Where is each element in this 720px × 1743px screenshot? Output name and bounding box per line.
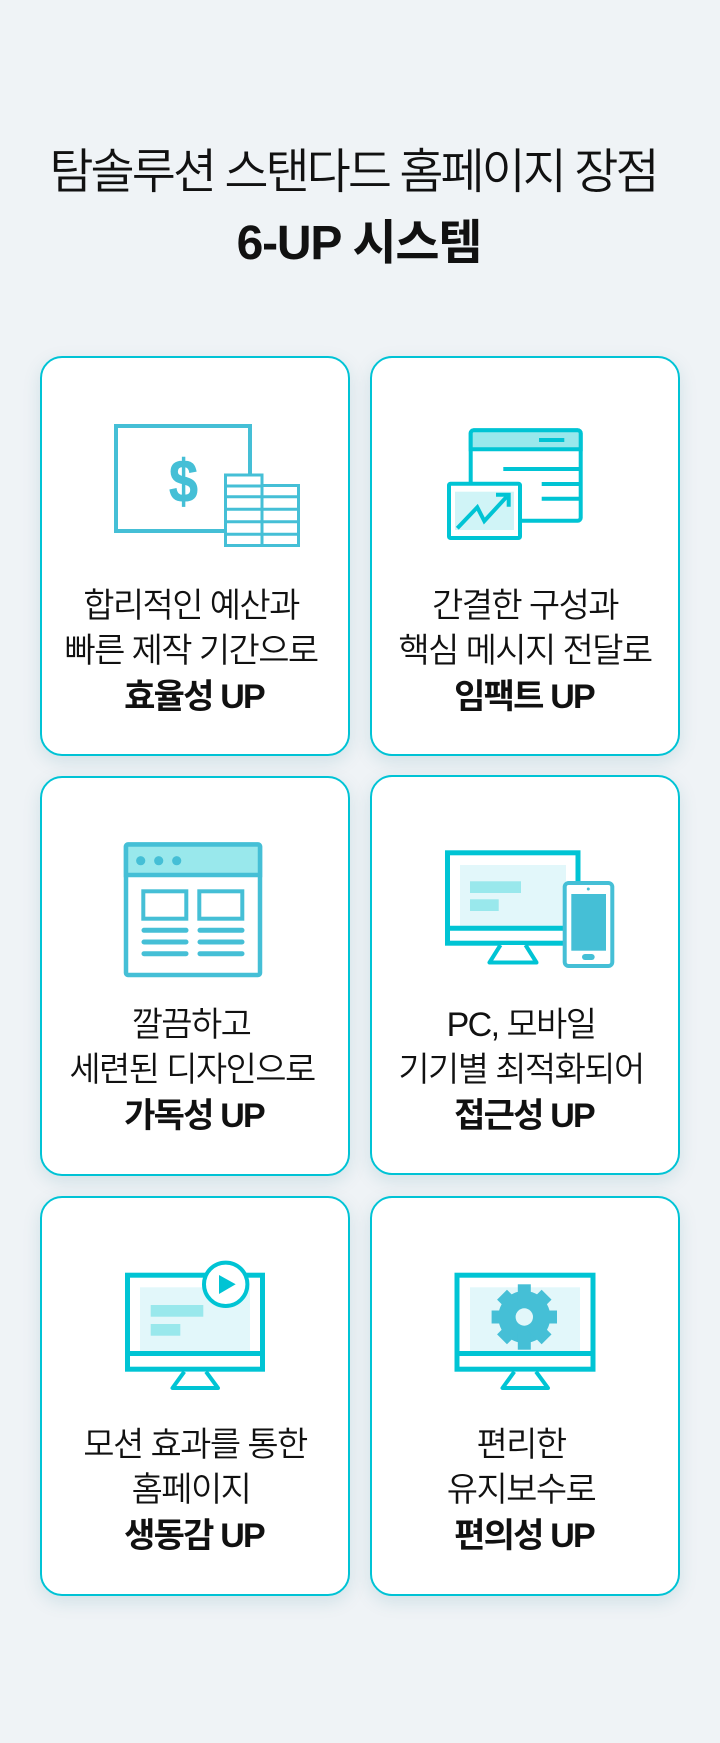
panel: 생동감 UP <box>40 1196 350 1596</box>
text: 접근성: 접근성 UP <box>454 1097 594 1135</box>
text: 생동감: 모션 효과를 통한 <box>83 1426 307 1464</box>
text: 효율성: 효율성 UP <box>124 678 264 716</box>
text: 편의성 <box>447 1426 595 1555</box>
panel: 효율성 UP <box>40 356 350 756</box>
title line 2: 6-UP 시스템 <box>237 217 481 270</box>
text: 임팩트: 핵심 메시지 전달로 <box>398 632 652 670</box>
text: 가독성: 가독성 UP <box>124 1097 264 1135</box>
text: 생동감 <box>83 1426 308 1555</box>
panel: 가독성 UP <box>40 776 350 1176</box>
text: 가독성 <box>69 1006 315 1135</box>
icon: money and coins: $ <box>169 447 198 515</box>
text: 효율성: 빠른 제작 기간으로 <box>64 632 318 670</box>
text: 편의성: 편리한 <box>476 1426 566 1464</box>
icon: web page layout <box>124 842 262 978</box>
text: 생동감: 홈페이지 <box>132 1471 250 1509</box>
text: 접근성 <box>398 1006 644 1135</box>
panel: 편의성 UP <box>370 1196 680 1596</box>
text: 임팩트: 임팩트 UP <box>454 678 594 716</box>
text: 편의성: 유지보수로 <box>447 1471 595 1509</box>
icon: monitor with play button <box>125 1260 265 1390</box>
icon: monitor with gear <box>454 1272 596 1390</box>
text: 임팩트 <box>398 587 652 716</box>
title <box>49 146 657 270</box>
panel: 접근성 UP <box>370 775 680 1175</box>
title line 1: 탐솔루션 스탠다드 홈페이지 장점 <box>49 146 657 199</box>
text: 가독성: 깔끔하고 <box>132 1006 250 1044</box>
text: 접근성: 기기별 최적화되어 <box>398 1051 644 1089</box>
text: 생동감: 생동감 UP <box>124 1517 264 1555</box>
text: 임팩트: 간결한 구성과 <box>432 587 618 625</box>
text: 접근성: PC, 모바일 <box>447 1006 595 1044</box>
text: 가독성: 세련된 디자인으로 <box>69 1051 315 1089</box>
icon: money and coins <box>114 424 300 547</box>
icon: window with growth chart <box>447 428 583 540</box>
text: 편의성: 편의성 UP <box>454 1517 594 1555</box>
icon: monitor and phone <box>445 850 614 968</box>
text: 효율성 <box>64 587 318 716</box>
panel: 임팩트 UP <box>370 356 680 756</box>
text: 효율성: 합리적인 예산과 <box>83 587 299 625</box>
